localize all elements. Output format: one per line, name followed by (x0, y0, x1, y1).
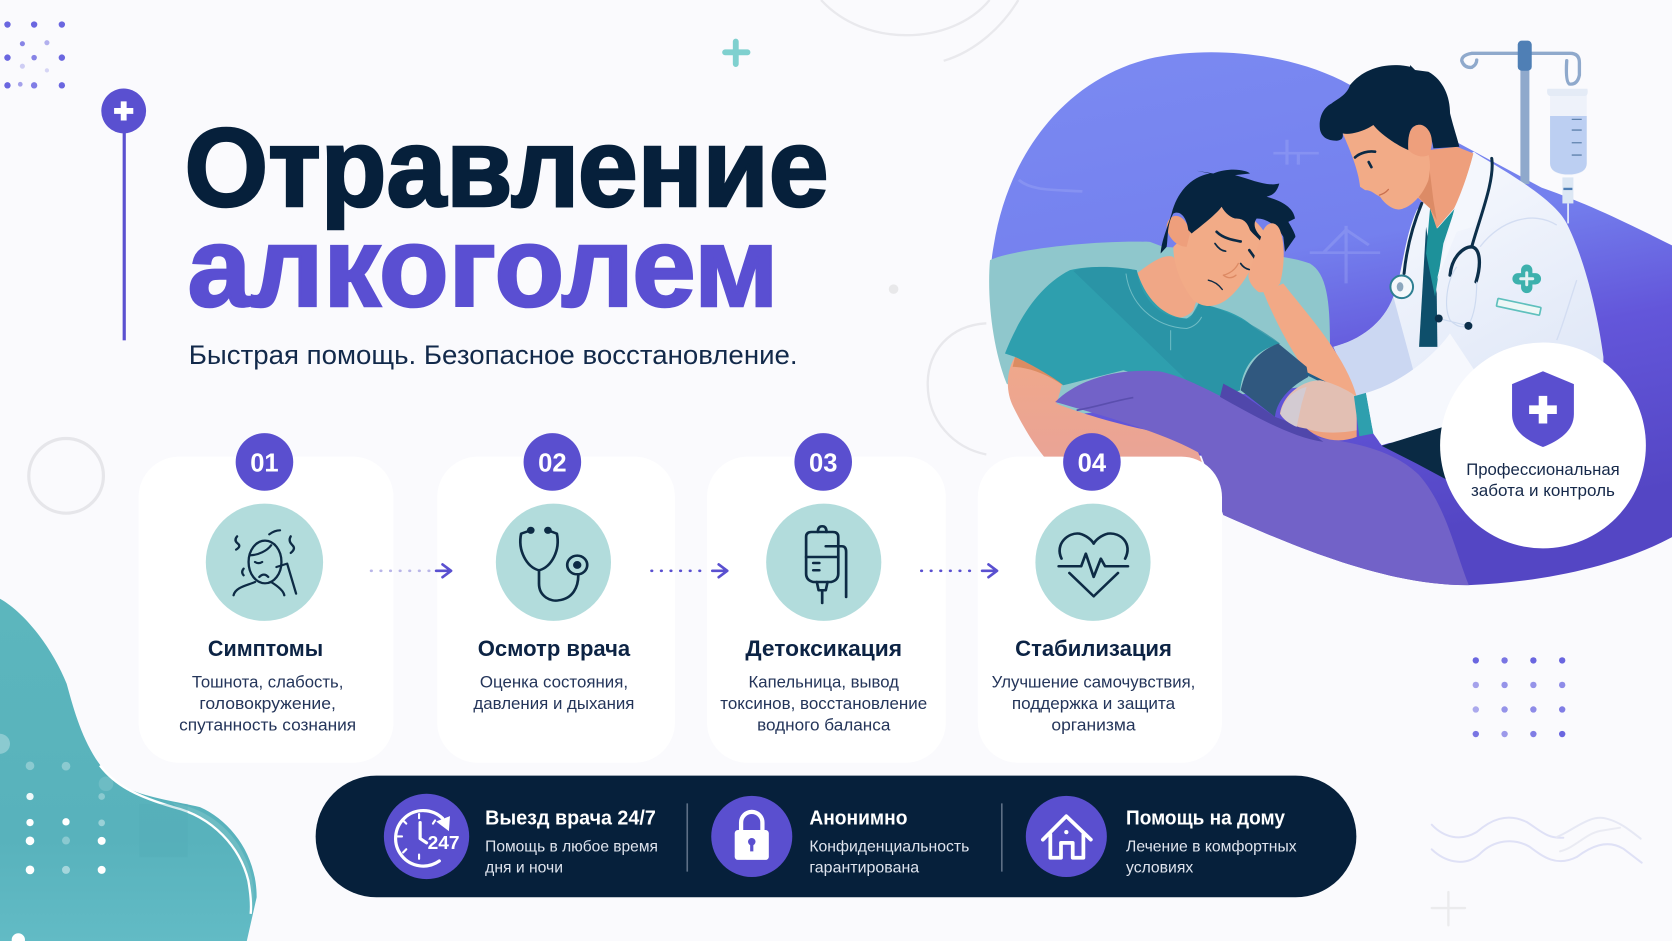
doctor neck (1417, 147, 1473, 228)
lapel (1437, 152, 1494, 280)
decorative top-left dot grid (4, 21, 65, 89)
shirt (1005, 267, 1280, 397)
description: Оценка состояния, (480, 673, 628, 692)
IV pole (1462, 41, 1579, 184)
step card 1: symptoms (139, 433, 393, 763)
blood pressure cuff (1241, 344, 1308, 417)
IV bag (1547, 89, 1588, 223)
scrubs (1419, 227, 1437, 347)
benefit: doctor 24/7 (384, 794, 658, 879)
blanket (1055, 371, 1469, 585)
benefit: home care: условиях (1126, 860, 1193, 877)
benefit: home care: Лечение в комфортных (1126, 838, 1297, 855)
bottom info bar (316, 776, 1356, 897)
sleeve shadow on arm (1013, 357, 1063, 385)
doctor cuff (1354, 393, 1373, 436)
decorative top arcs (821, 0, 1018, 61)
number badge (794, 433, 852, 491)
number badge (1063, 433, 1121, 491)
doctor face lines (1355, 151, 1388, 195)
step card 3: detox (707, 433, 946, 763)
description: Тошнота, слабость, (192, 673, 343, 692)
ear (1167, 216, 1190, 247)
description (992, 673, 1195, 734)
doctor sleeve shade (1333, 297, 1415, 397)
number badge (236, 433, 293, 491)
badge text: забота и контроль (1471, 481, 1615, 500)
pin marker with plus (101, 89, 146, 340)
neck (1137, 256, 1197, 318)
doctor face (1343, 125, 1430, 209)
pillow (989, 242, 1330, 417)
icon: unwell person (206, 504, 323, 621)
icon: heart with pulse (1035, 504, 1151, 621)
heading: Детоксикация (745, 636, 902, 661)
benefit: anonymous: гарантирована (809, 860, 919, 877)
blob background (990, 52, 1672, 585)
icon: shield (1512, 371, 1574, 447)
description: поддержка и защита (1012, 694, 1176, 713)
badge text (1466, 460, 1620, 500)
description: головокружение, (199, 694, 336, 713)
coat seam (1480, 218, 1577, 340)
patient (989, 170, 1357, 467)
doctor back layers (1320, 41, 1603, 487)
arrow 3 (921, 564, 997, 577)
illustration: doctor and patient (989, 41, 1672, 585)
heading: Осмотр врача (478, 636, 631, 661)
badge text: Профессиональная (1466, 460, 1620, 479)
face lines (1208, 232, 1258, 290)
doctor ear (1408, 125, 1432, 156)
description (720, 673, 927, 734)
doctor trousers (1382, 427, 1460, 487)
arrow 1 (371, 564, 451, 577)
number badge: 03 (809, 450, 837, 478)
description: токсинов, восстановление (720, 694, 927, 713)
icon: clock 24/7: 247 (428, 833, 460, 853)
lower arm (1008, 357, 1203, 467)
description: водного баланса (757, 715, 891, 734)
description: спутанность сознания (179, 715, 356, 734)
neck shadow (1418, 160, 1437, 220)
description (473, 673, 634, 713)
coat pocket tag (1496, 298, 1541, 315)
stethoscope (1390, 158, 1492, 330)
wrist skin (1307, 414, 1357, 440)
description: Капельница, вывод (749, 673, 899, 692)
step card 2: examination (437, 433, 675, 763)
hair (1161, 170, 1295, 254)
decorative left ring (29, 438, 103, 513)
face (1173, 207, 1265, 306)
benefit: doctor 24/7: дня и ночи (485, 860, 563, 877)
dark blanket fold (1220, 384, 1323, 442)
benefit: doctor 24/7: Помощь в любое время (485, 838, 658, 855)
hands and doctor sleeve (1077, 334, 1477, 445)
doctor lower sleeve (1366, 334, 1477, 445)
benefit: home care: Помощь на дому (1126, 808, 1286, 830)
icon: padlock (711, 796, 792, 877)
number badge (524, 433, 581, 491)
description: Улучшение самочувствия, (992, 673, 1195, 692)
step card 4: stabilization (978, 433, 1222, 763)
ghost shapes (1019, 140, 1380, 283)
badge: professional care (1440, 342, 1646, 548)
icon: house (1026, 796, 1107, 877)
title: Отравление (184, 106, 829, 230)
hand on head (1248, 223, 1284, 292)
collar stitch (1126, 274, 1202, 350)
number badge: 02 (538, 450, 567, 478)
badge circle (1440, 342, 1646, 548)
decorative waves and plus (1432, 818, 1642, 925)
icon: IV drip (766, 504, 881, 621)
doctor hand (1280, 380, 1357, 433)
description (179, 673, 356, 734)
fold line (1077, 398, 1133, 410)
heading: Симптомы (208, 636, 323, 661)
subtitle: Быстрая помощь. Безопасное восстановление. (189, 340, 798, 370)
description: давления и дыхания (473, 694, 634, 713)
title: алкоголем (188, 204, 778, 330)
doctor hair (1320, 65, 1459, 150)
scrub collar (1426, 208, 1455, 297)
doctor coat (1333, 152, 1603, 444)
raised forearm (1263, 284, 1357, 397)
shirt shade (1073, 267, 1280, 397)
icon: stethoscope (496, 504, 611, 621)
benefit: doctor 24/7: Выезд врача 24/7 (485, 808, 656, 830)
decorative teal plus (725, 42, 747, 64)
benefit: anonymous: Анонимно (809, 808, 907, 830)
decorative right dot grid (1473, 657, 1565, 737)
decorative ghost arc and pin (889, 284, 986, 454)
coat emblem cross (1518, 270, 1535, 287)
benefit: anonymous: Конфиденциальность (809, 838, 969, 855)
benefit: anonymous (711, 796, 969, 877)
heading: Стабилизация (1015, 636, 1172, 661)
icon: clock 24/7 (384, 794, 469, 879)
cuff tube (1307, 374, 1353, 397)
arrow 2 (652, 564, 727, 577)
benefit: home care (1026, 796, 1297, 877)
fingers (1281, 387, 1307, 427)
description: организма (1051, 715, 1136, 734)
title (184, 106, 829, 330)
number badge: 04 (1078, 450, 1107, 478)
number badge: 01 (250, 450, 279, 478)
teal corner blob (0, 599, 257, 941)
